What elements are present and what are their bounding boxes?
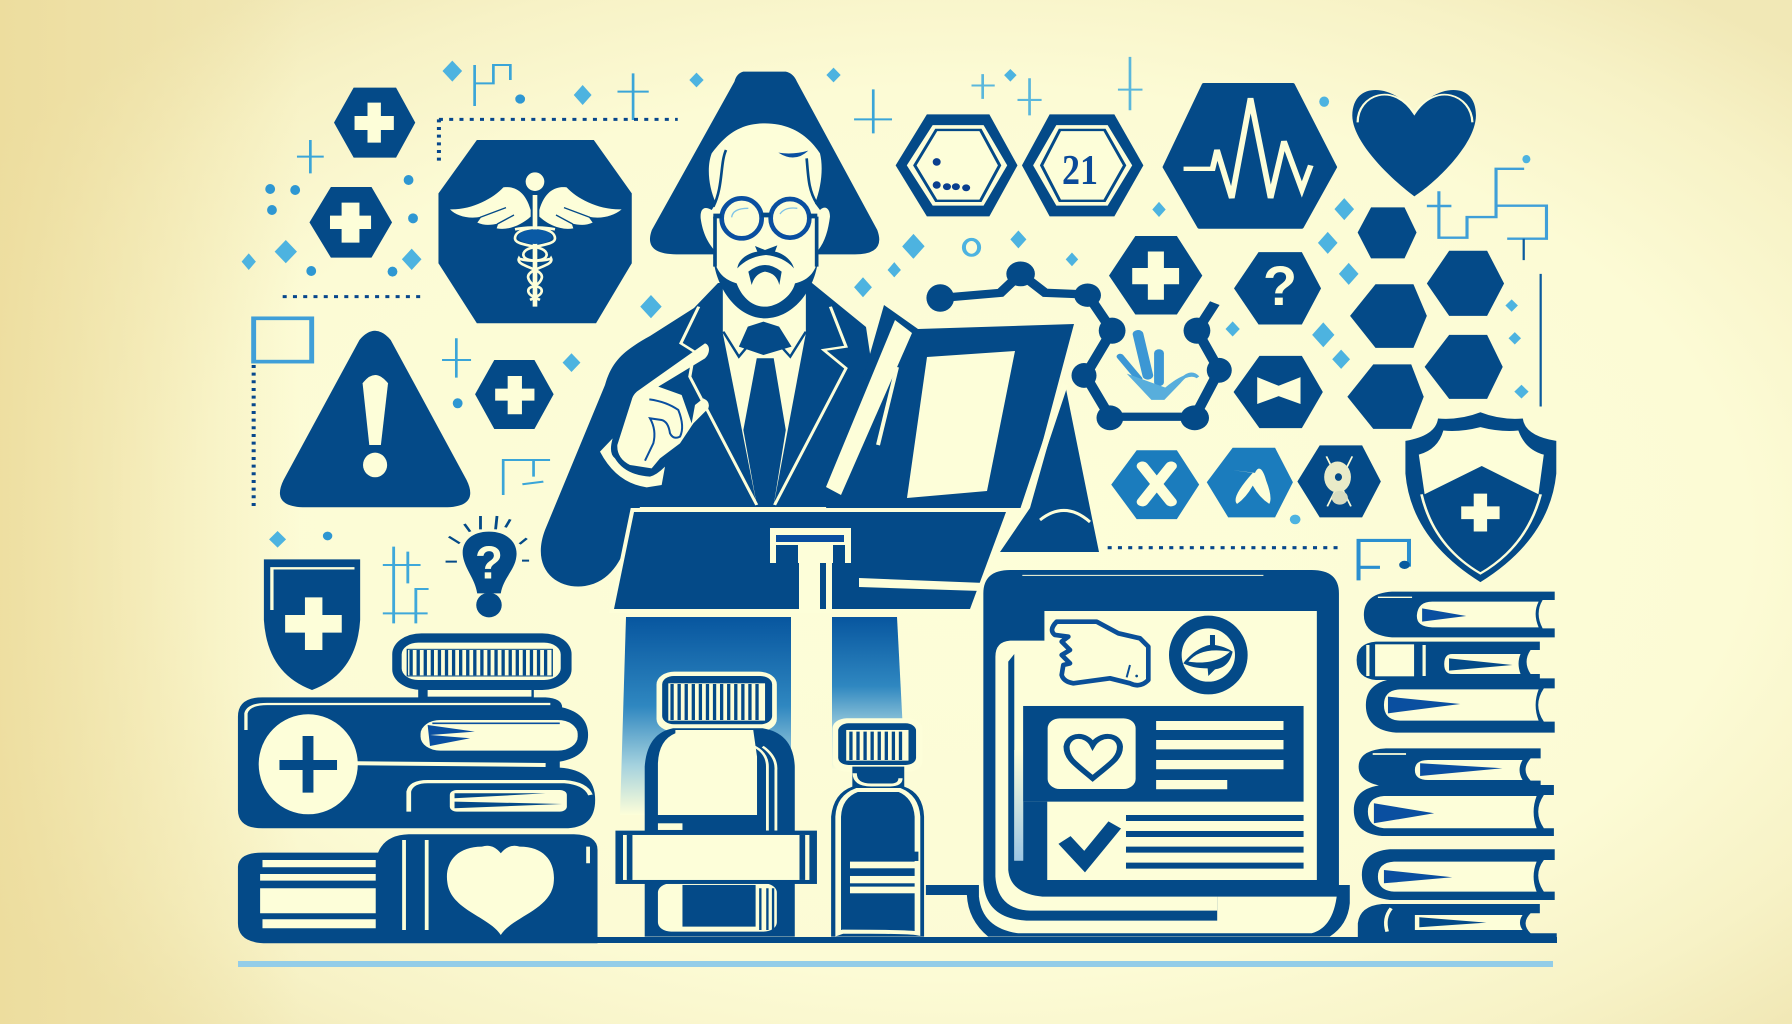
gradient panel below lectern [620, 617, 905, 815]
blue accent marks: upper right [888, 57, 1546, 580]
small medicine bottle [831, 718, 924, 937]
right book 7 [1358, 904, 1557, 938]
icon: pointing hand on tablet [1052, 622, 1148, 685]
icon: blue hand in molecule [1120, 334, 1198, 399]
icon: numbered hexagon [1022, 114, 1143, 216]
icon: protective shield with plus [1405, 412, 1556, 582]
icon: caduceus octagon [438, 140, 632, 323]
tablet and right book stack [926, 570, 1557, 938]
icon: lambda hexagon [1207, 448, 1293, 517]
icon: warning triangle [280, 331, 470, 507]
figure: speaker at lectern [541, 72, 1099, 815]
right book 2 [1357, 642, 1540, 680]
right book 6 [1362, 849, 1555, 900]
icon: question hexagon [1234, 252, 1321, 324]
list panel with heart [1023, 706, 1304, 802]
icon: bow hexagon [1234, 356, 1323, 428]
icon: plus hexagon [1109, 236, 1202, 314]
molecule ring [926, 261, 1232, 430]
icon: X hexagon [1111, 450, 1199, 519]
icon: light bulb with question mark: ? [475, 537, 503, 588]
accents near bulb [269, 531, 429, 623]
icon: shield with plus [264, 559, 360, 690]
shirt and lapels [681, 280, 846, 505]
tablet frame [983, 570, 1339, 921]
tablet stand [926, 883, 1350, 937]
icon: round fish badge on tablet [1175, 622, 1241, 688]
open book [826, 305, 1099, 552]
right book 4 [1359, 748, 1541, 787]
icon: plus hexagon top [334, 88, 415, 158]
icon: light bulb with question mark [446, 516, 529, 617]
right book 3 [1366, 678, 1555, 733]
label: number 21: 21 [1062, 148, 1098, 194]
suit jacket [541, 283, 900, 587]
blue accent marks: upper left [242, 61, 924, 507]
icon: plus hexagon small [475, 360, 554, 429]
lectern top [614, 512, 1006, 610]
hand pointing [600, 343, 709, 487]
icon: plus hexagons and warning triangle [280, 88, 632, 507]
left books, pill bottles, shield, bulb [238, 516, 924, 943]
label: question mark: ? [1263, 254, 1297, 317]
right book 1 [1364, 592, 1555, 637]
large pill bottle [615, 672, 817, 937]
icon: caduceus symbol [450, 172, 622, 307]
baseline and blue rule [238, 937, 1557, 967]
hexagon badges, heart, shield, molecule [896, 84, 1556, 582]
large triangle behind head [650, 72, 879, 254]
icon: dotted hexagon [896, 114, 1017, 216]
right book 5 [1354, 785, 1554, 836]
icon: heart [1352, 90, 1476, 196]
icon: pill cap [392, 633, 572, 700]
head with glasses and beard [701, 123, 830, 318]
book with heart emblem [238, 834, 598, 943]
icon: insect hexagon [1297, 445, 1381, 517]
book stack with plus emblem [238, 697, 595, 828]
checklist [1065, 815, 1304, 869]
icon: ECG hexagon [1164, 84, 1335, 227]
plain hexagon cluster [1347, 207, 1504, 429]
icon: plus hexagon left [309, 187, 392, 258]
